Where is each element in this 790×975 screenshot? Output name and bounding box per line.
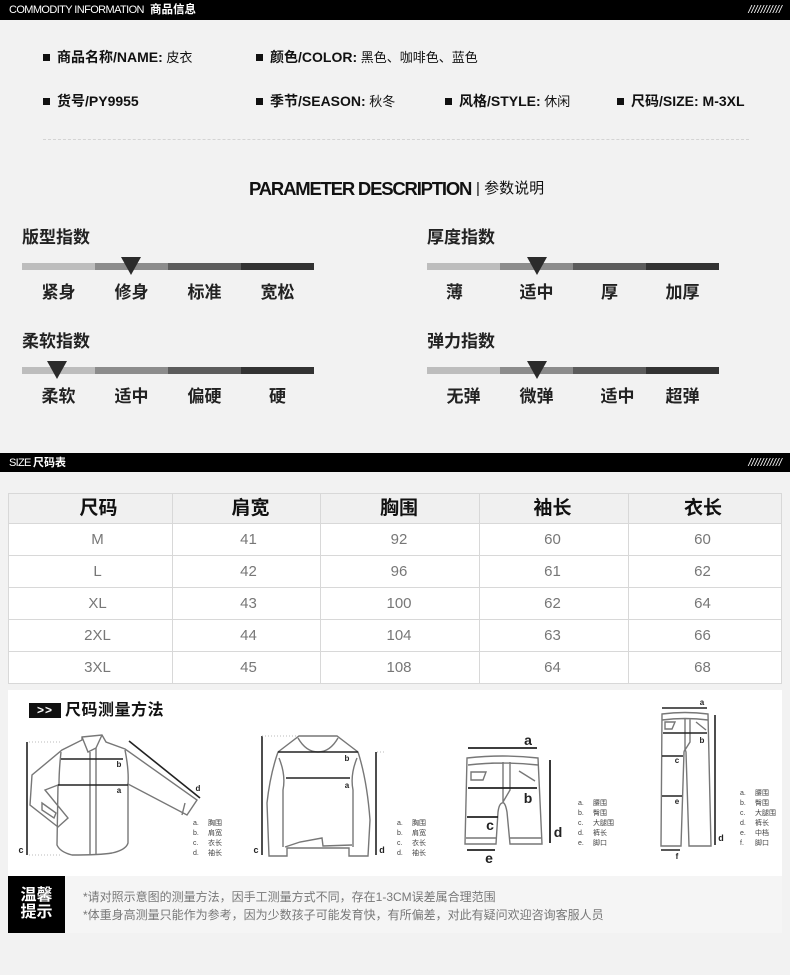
scale: thickness index xyxy=(427,228,719,302)
size table: 62 xyxy=(694,563,711,580)
scale: elasticity index: 微弹 xyxy=(520,387,554,406)
scale: softness index: 偏硬 xyxy=(188,387,222,406)
diagram: trousers: 大腿围 xyxy=(755,808,776,817)
diagram: trousers: b xyxy=(700,736,705,745)
diagram: sweater: 肩宽 xyxy=(412,828,426,837)
heading: parameter description: PARAMETER DESCRIPTION xyxy=(249,178,471,199)
diagram: sweater: d. xyxy=(397,850,403,857)
scale: fit index: 紧身 xyxy=(42,283,76,302)
size table: 63 xyxy=(544,627,561,644)
header bar: commodity information: COMMODITY INFORMATION xyxy=(9,4,144,16)
size table: 2XL xyxy=(84,627,111,644)
size table: 胸围 xyxy=(380,498,418,519)
size table: 60 xyxy=(544,531,561,548)
diagram: trousers: f xyxy=(676,852,679,861)
product info list: 货号/PY9955 xyxy=(57,93,139,109)
diagram: shorts: 脚口 xyxy=(593,838,607,847)
size table: 64 xyxy=(694,595,711,612)
diagram: shorts: a. xyxy=(578,800,584,807)
diagram: shirt: b. xyxy=(193,830,199,837)
heading: parameter description: | 参数说明 xyxy=(476,180,544,197)
diagram: trousers: 臀围 xyxy=(755,799,769,807)
diagram: trousers: c. xyxy=(740,810,746,817)
diagram: trousers: e xyxy=(675,797,680,806)
diagram: sweater: 胸围 xyxy=(412,818,426,827)
diagram: trousers: 脚口 xyxy=(755,838,769,847)
tips badge: 温馨 xyxy=(20,887,52,904)
diagram: shorts: a xyxy=(524,732,532,748)
header bar: commodity information: 商品信息 xyxy=(150,4,196,16)
scale: fit index: 版型指数 xyxy=(22,228,90,247)
tips text: *体重身高测量只能作为参考，因为少数孩子可能发育快，有所偏差，对此有疑问欢迎咨询客服人员 xyxy=(83,908,604,922)
scale: elasticity index xyxy=(427,332,719,406)
size table: 68 xyxy=(694,659,711,676)
diagram: trousers: b. xyxy=(740,800,746,807)
diagram: sweater: 袖长 xyxy=(412,848,426,857)
heading: measurement method xyxy=(29,701,164,719)
diagram: shirt: 肩宽 xyxy=(208,828,222,837)
size table: 衣长 xyxy=(684,498,722,519)
size table: 92 xyxy=(391,531,407,548)
diagram: trousers: 中档 xyxy=(755,828,769,837)
size table xyxy=(8,493,782,684)
size table: XL xyxy=(88,595,107,612)
scale: elasticity index: 弹力指数 xyxy=(427,332,495,351)
diagram: sweater xyxy=(253,736,426,857)
scale: elasticity index: 无弹 xyxy=(446,387,480,406)
size table: 66 xyxy=(694,627,711,644)
size table: M xyxy=(91,531,104,548)
product info list: 颜色/COLOR: 黑色、咖啡色、蓝色 xyxy=(270,49,478,65)
diagram: trousers: a. xyxy=(740,790,746,797)
header bar: commodity information: /////////// xyxy=(748,4,782,16)
scale: elasticity index: 超弹 xyxy=(666,387,700,406)
product info list: 商品名称/NAME: 皮衣 xyxy=(57,49,192,65)
scale: fit index: 宽松 xyxy=(260,283,294,302)
size table: 袖长 xyxy=(533,498,572,519)
size table: 64 xyxy=(544,659,561,676)
scale: softness index: 柔软指数 xyxy=(22,332,90,351)
diagram: shirt: 袖长 xyxy=(208,848,222,857)
diagram: shorts: d. xyxy=(578,830,584,837)
diagram: trousers: d xyxy=(718,833,724,843)
diagram: shorts: b xyxy=(524,790,532,806)
heading: measurement method: 尺码测量方法 xyxy=(65,702,164,719)
diagram: shorts: d xyxy=(554,824,562,840)
diagram: trousers: c xyxy=(675,756,680,765)
size table: 62 xyxy=(544,595,561,612)
scale: fit index: 标准 xyxy=(188,283,222,302)
diagram: shirt: d xyxy=(196,784,201,793)
diagram: shirt: a. xyxy=(193,820,199,827)
scale: thickness index: 厚 xyxy=(601,283,618,302)
scale: fit index xyxy=(22,228,314,302)
diagram: sweater: b. xyxy=(397,830,403,837)
diagram: shirt: 衣长 xyxy=(208,838,222,847)
product info list xyxy=(43,49,745,109)
size table: 肩宽 xyxy=(231,498,270,519)
header bar: commodity information xyxy=(0,0,790,20)
size table: 100 xyxy=(386,595,412,612)
diagram: shorts: e xyxy=(485,850,493,866)
size table: 42 xyxy=(240,563,257,580)
diagram: shirt: c xyxy=(18,845,24,855)
size table: 43 xyxy=(240,595,257,612)
product info list: 季节/SEASON: 秋冬 xyxy=(270,93,395,109)
scale: fit index: 修身 xyxy=(114,283,148,302)
diagram: shorts: 腰围 xyxy=(593,799,607,807)
diagram: shirt xyxy=(18,735,222,857)
diagram: sweater: c xyxy=(253,845,259,855)
size table: L xyxy=(93,563,102,580)
diagram: trousers xyxy=(661,698,776,861)
header bar: size chart: SIZE 尺码表 xyxy=(9,457,66,469)
size table: 61 xyxy=(544,563,561,580)
product info list: 尺码/SIZE: M-3XL xyxy=(631,93,745,109)
scale: thickness index: 适中 xyxy=(520,283,554,302)
diagram: shorts xyxy=(465,732,614,866)
diagram: trousers: 腰围 xyxy=(755,789,769,797)
diagram: sweater: d xyxy=(379,845,385,855)
diagram: shirt: c. xyxy=(193,840,198,847)
size table: 60 xyxy=(694,531,711,548)
size table: 108 xyxy=(386,659,412,676)
size table: 45 xyxy=(240,659,257,676)
diagram: trousers: a xyxy=(700,698,705,707)
scale: elasticity index: 适中 xyxy=(600,387,634,406)
diagram: shorts: 臀围 xyxy=(593,809,607,817)
scale: thickness index: 厚度指数 xyxy=(427,228,495,247)
heading: measurement method: >> xyxy=(37,703,53,717)
size table: 41 xyxy=(240,531,257,548)
diagram: shirt: b xyxy=(117,760,122,769)
diagram: shorts: e. xyxy=(578,840,584,847)
diagram: shorts: c. xyxy=(578,820,584,827)
diagram: shorts: b. xyxy=(578,810,584,817)
diagram: sweater: a xyxy=(345,781,350,790)
diagram: shorts: c xyxy=(486,817,494,833)
size table: 3XL xyxy=(84,659,111,676)
size table: 44 xyxy=(240,627,257,644)
tips text: *请对照示意图的测量方法，因手工测量方式不同，存在1-3CM误差属合理范围 xyxy=(83,890,496,904)
product info list: 风格/STYLE: 休闲 xyxy=(459,93,570,109)
scale: thickness index: 薄 xyxy=(446,283,463,302)
scale: softness index: 硬 xyxy=(269,387,286,406)
header bar: size chart: /////////// xyxy=(748,457,782,469)
diagram: sweater: c. xyxy=(397,840,402,847)
tips text xyxy=(83,890,604,922)
diagram: shorts: 裤长 xyxy=(593,828,607,837)
diagram: shirt: 胸围 xyxy=(208,818,222,827)
tips badge xyxy=(8,876,65,933)
diagram: sweater: a. xyxy=(397,820,403,827)
diagram: trousers: e. xyxy=(740,830,746,837)
header bar: size chart xyxy=(0,453,790,472)
diagram: trousers: 裤长 xyxy=(755,818,769,827)
diagram: shorts: 大腿围 xyxy=(593,818,614,827)
panel: measurement method xyxy=(8,690,782,876)
diagram: shirt: a xyxy=(117,786,122,795)
diagram: sweater: 衣长 xyxy=(412,838,426,847)
diagram: trousers: d. xyxy=(740,820,746,827)
scale: softness index: 柔软 xyxy=(42,387,76,406)
diagram: shirt: d. xyxy=(193,850,199,857)
scale: thickness index: 加厚 xyxy=(666,283,700,302)
scale: softness index xyxy=(22,332,314,406)
size table: 96 xyxy=(391,563,407,580)
diagram: sweater: b xyxy=(345,754,350,763)
tips badge: 提示 xyxy=(20,904,52,921)
size table: 104 xyxy=(386,627,412,644)
diagram: trousers: f. xyxy=(740,840,744,847)
size table: 尺码 xyxy=(79,498,118,519)
scale: softness index: 适中 xyxy=(114,387,148,406)
panel: tips xyxy=(8,876,782,933)
